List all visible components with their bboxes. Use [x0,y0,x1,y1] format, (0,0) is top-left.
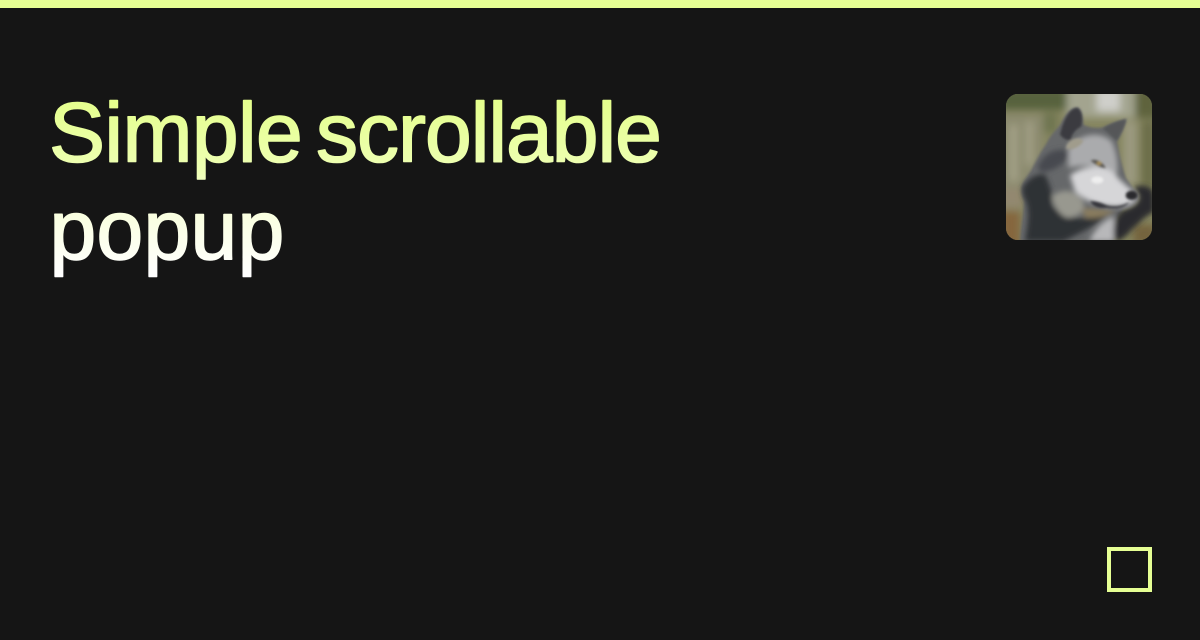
eye [1091,160,1106,168]
icon: wolf avatar [1006,94,1152,240]
corner square logo [1107,547,1152,592]
muzzle highlight [1091,176,1103,184]
tan throat [1082,209,1115,218]
dark neck fur [1022,174,1107,241]
nose [1126,191,1138,200]
pale chest [1052,191,1084,218]
title: Simple [49,86,302,180]
right dark fur [1114,186,1154,241]
title: popup [50,183,285,277]
tan ear patch [1066,138,1083,149]
mane shadow [1037,150,1072,172]
ear dark [1060,108,1082,140]
second ear [1103,119,1126,141]
wolf body [1020,107,1139,241]
top accent bar [0,0,1200,8]
pale lower chest [1089,216,1114,241]
forest background [1000,88,1160,248]
white muzzle [1070,167,1136,207]
title [49,86,661,278]
title: scrollable [316,86,661,180]
mouth [1090,201,1129,209]
forehead [1068,135,1117,175]
